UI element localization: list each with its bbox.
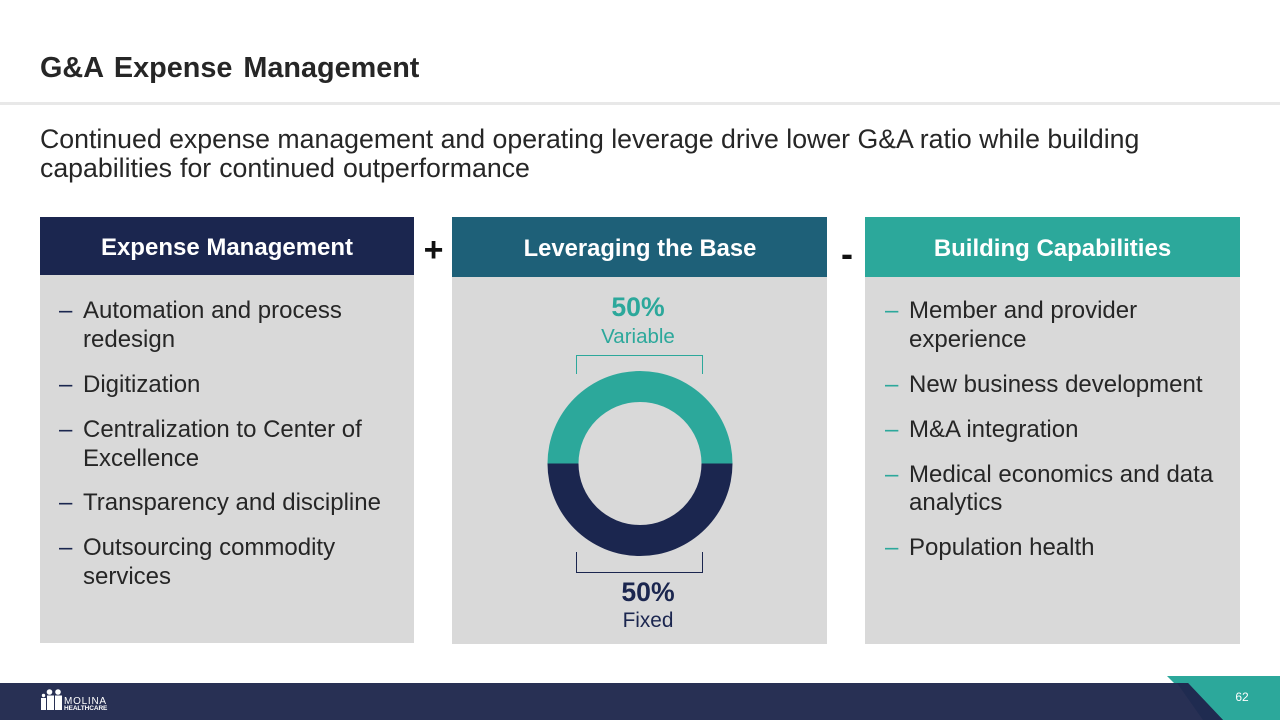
heading: leveraging the base	[452, 217, 827, 277]
bullet list: building capabilities: –	[885, 297, 898, 324]
bullet list: building capabilities: Medical economics and data	[909, 461, 1213, 488]
bullet list: building capabilities: New business development	[909, 371, 1202, 398]
bullet list: building capabilities: –	[885, 534, 898, 561]
label: 50% variable: Variable	[601, 325, 675, 348]
bullet list: expense management	[59, 297, 381, 590]
donut segment: fixed 50%	[548, 464, 732, 556]
label: 50% fixed: Fixed	[623, 609, 673, 632]
panel: leveraging the base	[452, 217, 827, 644]
subtitle: Continued expense management and operating leverage drive lower G&A ratio while building	[40, 124, 1139, 154]
bullet list: building capabilities: –	[885, 461, 898, 488]
bullet list: expense management: Automation and process	[83, 297, 342, 324]
bullet list: building capabilities: Member and provider	[909, 297, 1137, 324]
bracket: variable	[576, 356, 702, 374]
logo icon: people	[41, 689, 62, 710]
bullet list: expense management: services	[83, 563, 171, 590]
title rule	[0, 102, 1280, 105]
logo: molina healthcare	[41, 689, 108, 712]
logo wordmark: HEALTHCARE	[64, 705, 107, 712]
bullet list: building capabilities: analytics	[909, 489, 1002, 516]
panel: expense management	[40, 217, 414, 643]
plus sign: +	[424, 231, 443, 269]
subtitle	[40, 124, 1139, 183]
heading: leveraging the base: Leveraging the Base	[524, 235, 756, 262]
bullet list: expense management: Centralization to Center of	[83, 416, 362, 443]
bullet list: building capabilities: –	[885, 371, 898, 398]
bullet list: expense management: Excellence	[83, 445, 199, 472]
bullet list: expense management: –	[59, 534, 72, 561]
label: 50% variable	[601, 292, 675, 348]
bullet list: expense management: –	[59, 371, 72, 398]
title: G&A Expense Management	[40, 52, 419, 84]
donut chart with brackets	[548, 355, 732, 573]
page number: 62	[1235, 690, 1249, 704]
donut segment: variable 50%	[548, 371, 732, 464]
bullet list: expense management: redesign	[83, 326, 175, 353]
label: 50% variable: 50%	[611, 292, 665, 322]
subtitle: capabilities for continued outperformance	[40, 153, 530, 183]
heading: building capabilities: Building Capabilities	[934, 235, 1171, 262]
heading: building capabilities	[865, 217, 1240, 277]
bullet list: expense management: –	[59, 297, 72, 324]
logo wordmark: MOLINA	[64, 696, 107, 706]
bullet list: expense management: Digitization	[83, 371, 200, 398]
label: 50% fixed	[621, 577, 675, 632]
label: 50% fixed: 50%	[621, 577, 675, 607]
bullet list: building capabilities: experience	[909, 326, 1026, 353]
footer bar	[0, 676, 1280, 720]
bracket: fixed	[576, 552, 702, 572]
minus sign: -	[841, 233, 853, 274]
bullet list: building capabilities: Population health	[909, 534, 1094, 561]
logo wordmark	[64, 696, 108, 712]
bullet list: expense management: –	[59, 416, 72, 443]
bullet list: expense management: Outsourcing commodity	[83, 534, 335, 561]
bullet list: expense management: –	[59, 489, 72, 516]
bullet list: expense management: Transparency and discipline	[83, 489, 381, 516]
bullet list: building capabilities: M&A integration	[909, 416, 1078, 443]
heading: expense management: Expense Management	[101, 234, 353, 261]
heading: expense management	[40, 217, 414, 275]
panel: building capabilities	[865, 217, 1240, 644]
bullet list: building capabilities	[885, 297, 1214, 561]
bullet list: building capabilities: –	[885, 416, 898, 443]
